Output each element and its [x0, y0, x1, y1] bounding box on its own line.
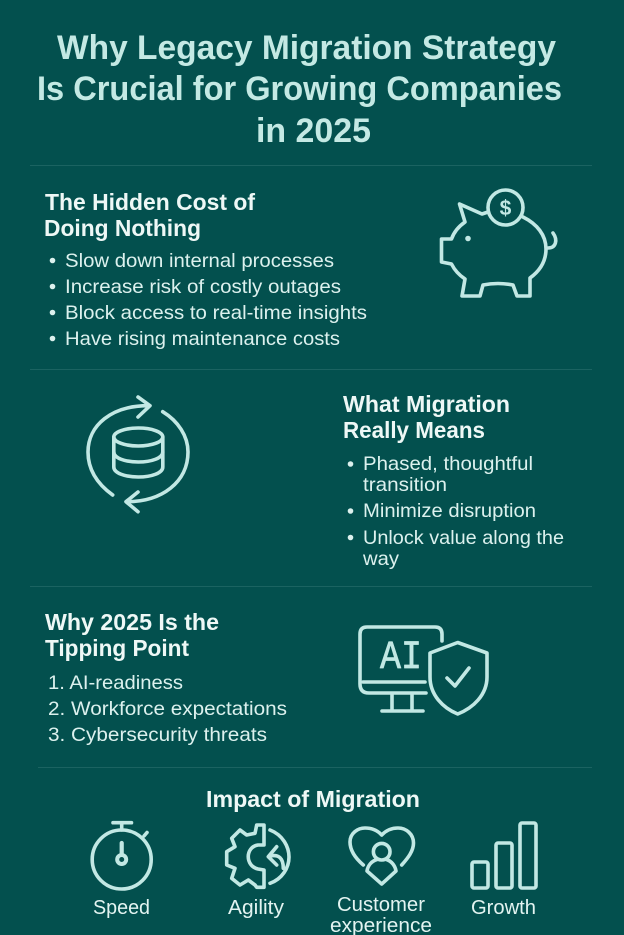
numbered list: tipping point: [48, 672, 287, 746]
bullet list: what migration means: way: [362, 548, 399, 570]
heading: what migration means: Really Means: [343, 417, 485, 443]
bullet list: what migration means: Phased, thoughtful: [363, 453, 533, 475]
numbered list: tipping point: 3. Cybersecurity threats: [48, 724, 267, 746]
bullet list: what migration means: transition: [363, 474, 447, 496]
icon: piggy bank with dollar coin: [442, 190, 556, 296]
bullet list: hidden cost: Increase risk of costly outages: [65, 276, 341, 298]
heading: what migration means: [343, 391, 510, 443]
bullet list: what migration means: Unlock value along the: [363, 527, 564, 549]
icon: AI monitor with shield: [360, 627, 487, 714]
label: speed: Speed: [93, 897, 150, 919]
label: growth: Growth: [471, 897, 536, 919]
heading: tipping point: Tipping Point: [45, 635, 189, 661]
title: [37, 29, 562, 150]
title: Is Crucial for Growing Companies: [37, 70, 562, 108]
icon: database with circular arrows: [88, 397, 188, 512]
bullet list: what migration means: Minimize disruption: [363, 500, 536, 522]
title: Why Legacy Migration Strategy: [57, 29, 556, 67]
icon: piggy bank with dollar coin: $: [500, 197, 512, 220]
bullet list: hidden cost: Slow down internal processes: [65, 250, 334, 272]
heading: hidden cost: Doing Nothing: [44, 215, 201, 241]
heading: impact of migration: Impact of Migration: [206, 786, 420, 812]
title: in 2025: [256, 112, 371, 150]
heading: hidden cost: The Hidden Cost of: [45, 189, 255, 215]
heading: tipping point: [45, 609, 219, 661]
bullet list: hidden cost: [50, 250, 367, 350]
icon: stopwatch: [92, 823, 151, 889]
label: customer experience: Customer: [337, 894, 425, 916]
icon: growth bars: [472, 823, 536, 888]
icon: heart with person: [350, 828, 414, 884]
heading: what migration means: What Migration: [343, 391, 510, 417]
panel: what migration really means: [88, 391, 564, 570]
bullet list: what migration means: [348, 453, 564, 570]
icon: gear with return arrow: [227, 825, 289, 887]
bullet list: hidden cost: Have rising maintenance costs: [65, 328, 340, 350]
label: agility: Agility: [228, 897, 284, 919]
panel: impact of migration: [92, 786, 536, 935]
icon: AI monitor with shield: AI: [380, 636, 422, 681]
heading: tipping point: Why 2025 Is the: [45, 609, 219, 635]
numbered list: tipping point: 2. Workforce expectations: [48, 698, 287, 720]
label: customer experience: [330, 894, 432, 935]
panel: why 2025 is the tipping point: [45, 609, 487, 746]
heading: hidden cost: [44, 189, 255, 241]
panel: the hidden cost of doing nothing: [44, 189, 556, 350]
bullet list: hidden cost: Block access to real-time insights: [65, 302, 367, 324]
numbered list: tipping point: 1. AI-readiness: [48, 672, 183, 694]
